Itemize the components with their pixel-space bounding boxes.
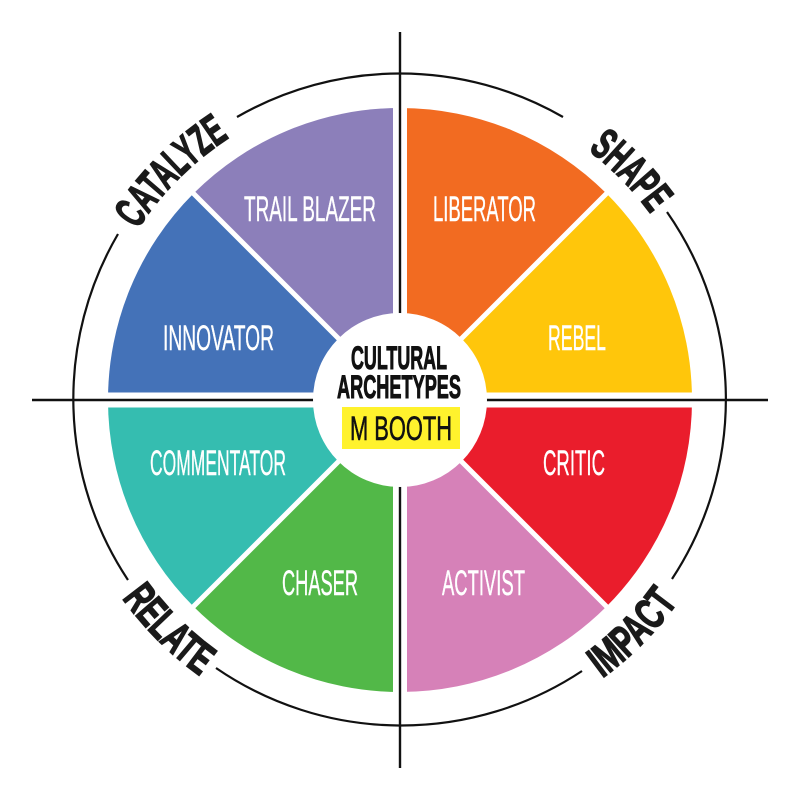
outer ring arcs <box>73 73 726 726</box>
curved label: relate: RELATE <box>122 580 218 676</box>
wedge: trail blazer <box>194 108 400 400</box>
wedge labels: INNOVATOR <box>163 319 274 358</box>
wedge: activist <box>400 400 606 692</box>
curved label: shape: SHAPE <box>591 129 675 214</box>
brand badge: M Booth: M BOOTH <box>350 410 452 448</box>
wedge: liberator <box>400 108 606 400</box>
wedge labels: ACTIVIST <box>442 564 525 603</box>
curved label: catalyze: CATALYZE <box>116 112 230 226</box>
wheel wedges <box>108 108 692 692</box>
wedge: critic <box>400 400 692 606</box>
wedge: rebel <box>400 194 692 400</box>
wedge labels: CHASER <box>282 564 358 603</box>
wedge labels: LIBERATOR <box>433 190 536 229</box>
curved label: impact: IMPACT <box>584 583 675 678</box>
wedge labels: TRAIL BLAZER <box>244 190 376 229</box>
wedge labels <box>150 190 606 603</box>
center circle <box>313 313 487 487</box>
wedge labels: CRITIC <box>543 444 605 483</box>
wedge labels: COMMENTATOR <box>150 444 286 483</box>
brand badge: M Booth <box>342 407 460 449</box>
wedge: chaser <box>194 400 400 692</box>
wedge: commentator <box>108 400 400 606</box>
center title: ARCHETYPES <box>337 369 461 405</box>
wedge: innovator <box>108 194 400 400</box>
center title: CULTURAL <box>351 340 447 376</box>
wedge labels: REBEL <box>548 319 606 358</box>
center title <box>337 340 461 405</box>
